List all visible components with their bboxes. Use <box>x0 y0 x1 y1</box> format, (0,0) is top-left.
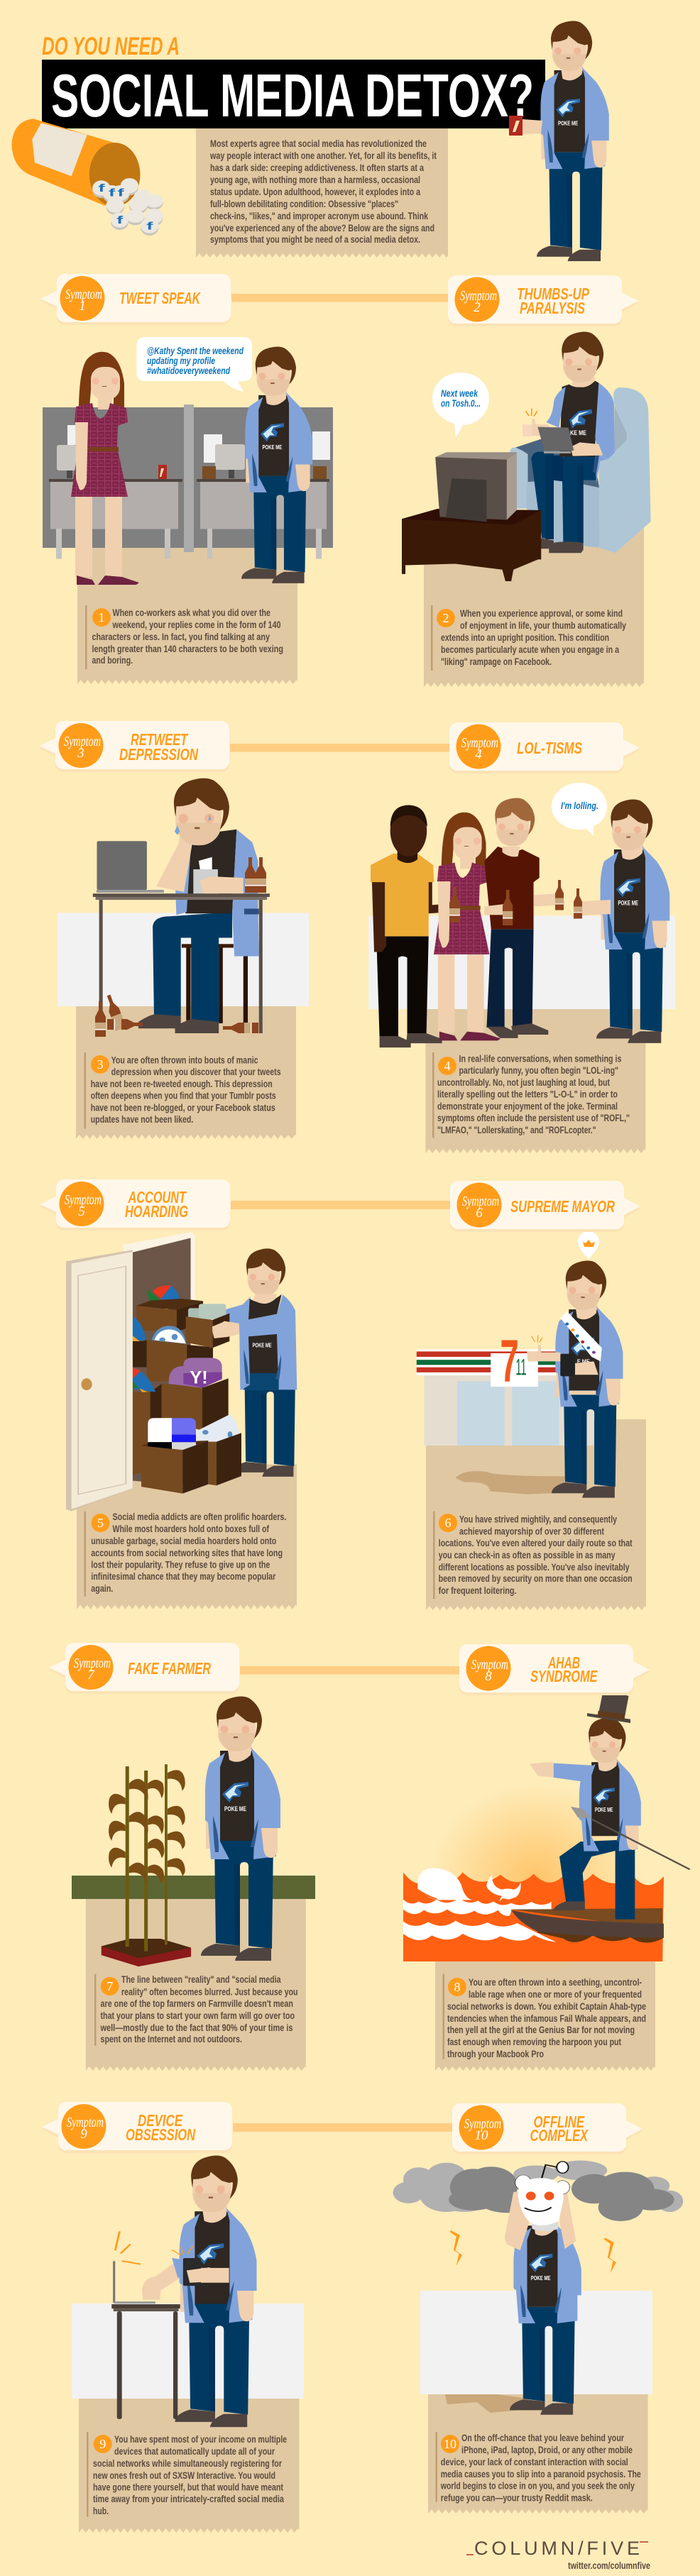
scene: sea, whale and boat <box>403 1868 664 1961</box>
header: symptom 8: Symptom <box>471 1657 508 1673</box>
character head: red shirt friend <box>495 798 535 846</box>
text: symptom 10: iPhone, iPad, laptop, Droid, or any other mobile <box>461 2444 633 2455</box>
speech bubble: tweet <box>136 337 252 392</box>
header: symptom 2: THUMBS-UP <box>517 285 589 303</box>
character: mayor with sash <box>552 1260 623 1498</box>
text: symptom 3: often deepens when you find that your Tumblr posts <box>91 1090 276 1101</box>
character: man lolling: POKE ME <box>618 899 638 906</box>
wall: symptom 10 <box>420 2291 652 2394</box>
text: symptom 4: demonstrate your enjoyment of the joke. Terminal <box>437 1100 618 1111</box>
header: symptom 8 <box>459 1644 650 1695</box>
panel: symptom 4 <box>425 1009 645 1153</box>
text: symptom 3: depression when you discover that your tweets <box>111 1066 281 1077</box>
text block: intro: full-blown debilitating condition: Obsessive "places" <box>210 198 398 209</box>
panel: symptom 3 <box>76 1006 296 1139</box>
header: symptom 8: AHAB <box>547 1653 580 1672</box>
wall: symptom 3 <box>58 913 309 1006</box>
character: hero man with mug: POKE ME <box>558 119 578 126</box>
text: symptom 4: uncontrollably. No, not just laughing at loud, but <box>437 1077 610 1088</box>
header: symptom 7: Symptom <box>74 1656 111 1671</box>
text: symptom 7: well—mostly due to the fact that 90% of your time is <box>100 2022 293 2033</box>
header: symptom 10: COMPLEX <box>530 2126 589 2145</box>
header: symptom 2: 2 <box>474 300 481 315</box>
text: symptom 3: 3 <box>97 1057 104 1072</box>
character: ahab <box>530 1692 690 1920</box>
text: symptom 6: different locations as possible. You've also inevitably <box>439 1561 630 1573</box>
header: symptom 2: PARALYSIS <box>520 299 585 317</box>
header: symptom 9: 9 <box>80 2127 87 2142</box>
text: symptom 1: characters or less. In fact, you find talking at any <box>92 631 270 642</box>
text: symptom 2 <box>431 605 626 671</box>
text: symptom 10: world begins to close in on you, and you seek the only <box>440 2479 635 2491</box>
header: symptom 1: TWEET SPEAK <box>119 289 201 307</box>
scene: office <box>43 404 333 559</box>
panel: symptom 6 <box>426 1419 646 1610</box>
header: symptom 1: 1 <box>79 299 86 314</box>
text: symptom 10: device, your lack of constant interaction with social <box>441 2456 628 2467</box>
hand on box <box>212 1321 239 1338</box>
header: symptom 3 <box>39 721 229 772</box>
header: symptom 6: SUPREME MAYOR <box>510 1197 615 1216</box>
connector band row 4 <box>222 1666 459 1675</box>
text: symptom 7 <box>94 1974 298 2046</box>
text: symptom 4: literally spelling out the letters "L-O-L" in order to <box>437 1089 618 1100</box>
stacked boxes and social icons: Y! <box>190 1367 208 1387</box>
panel: symptom 7 <box>86 1899 306 2071</box>
character head: crying man <box>174 778 229 845</box>
text: symptom 9: devices that automatically update all of your <box>114 2445 275 2457</box>
icon: lightning bolts <box>450 2219 616 2273</box>
speech bubble: tweet: #whatidoeveryweekend <box>147 365 230 376</box>
text: symptom 9 <box>87 2432 287 2517</box>
text: symptom 5: unusable garbage, social media hoarders hold onto <box>91 1535 276 1546</box>
text: symptom 7: spent on the Internet and not outdoors. <box>101 2033 242 2044</box>
header: symptom 3: 3 <box>77 746 84 761</box>
footer: twitter handle: twitter.com/columnfive <box>568 2560 650 2571</box>
text: symptom 7: The line between "reality" and "social media <box>121 1974 281 1985</box>
icon: mayor crown pin <box>578 1231 599 1259</box>
character: woman <box>71 352 139 585</box>
text: symptom 7: 7 <box>106 1979 113 1993</box>
text: symptom 2: extends into an upright position. This condition <box>441 632 609 643</box>
character: woman friend <box>434 813 501 1040</box>
text block: intro: status update. Upon adulthood, however, it explodes into a <box>210 186 420 197</box>
wall: symptom 9 <box>72 2303 304 2399</box>
reddit mask and raised arms <box>505 2162 576 2250</box>
character: man in reddit mask <box>510 2221 581 2415</box>
sash, phone and thumb <box>527 1311 602 1394</box>
speech bubble: tweet: updating my profile <box>147 355 215 366</box>
header: symptom 3: DEPRESSION <box>119 745 198 764</box>
panel: intro <box>196 128 448 258</box>
icon: pill bottle: f <box>116 214 124 226</box>
text block: intro: way people interact with one another. Yet, for all its benefits, it <box>209 150 437 161</box>
header: symptom 9: DEVICE <box>138 2111 182 2130</box>
text: symptom 8: through your Macbook Pro <box>447 2048 544 2059</box>
header: symptom 10: 10 <box>474 2128 488 2143</box>
text: symptom 7: reality" often becomes blurred. Just because you <box>121 1986 298 1997</box>
text: symptom 1: 1 <box>98 610 105 624</box>
character: man on couch head <box>562 331 603 382</box>
text: symptom 8 <box>443 1974 646 2059</box>
text: symptom 5 <box>84 1511 287 1597</box>
header: symptom 3: RETWEET <box>131 730 188 749</box>
header: symptom 5: ACCOUNT <box>128 1188 187 1206</box>
text: symptom 5: 5 <box>97 1516 104 1530</box>
scene: laptop on desk <box>111 2231 182 2419</box>
text: symptom 1: and boring. <box>92 654 133 666</box>
band: field green <box>72 1876 315 1899</box>
text: symptom 3: updates have not been liked. <box>91 1113 193 1125</box>
text: symptom 6: 6 <box>444 1516 452 1530</box>
text: symptom 10 <box>436 2432 641 2503</box>
character: man lolling <box>596 799 669 1043</box>
text: symptom 5: accounts from social networking sites that have long <box>91 1547 283 1558</box>
header: symptom 2: Symptom <box>460 288 497 304</box>
header: symptom 6 <box>450 1181 640 1232</box>
panel: symptom 9 <box>79 2399 299 2533</box>
header: symptom 9: Symptom <box>67 2115 104 2130</box>
scene: tv and table <box>402 452 541 581</box>
scene: man crying at laptop <box>93 827 270 1033</box>
text: symptom 8: then yell at the girl at the Genius Bar for not moving <box>447 2024 635 2035</box>
stacked boxes and social icons <box>132 1285 241 1494</box>
character: mayor with sash: E ME <box>577 1358 590 1365</box>
text: symptom 1: length greater than 140 characters to be both vexing <box>92 643 283 654</box>
text: symptom 10: On the off-chance that you leave behind your <box>461 2432 624 2443</box>
text: symptom 6 <box>433 1512 633 1599</box>
header: symptom 7 <box>49 1643 239 1694</box>
text: symptom 4: particularly funny, you often begin "LOL-ing" <box>459 1064 618 1076</box>
text: symptom 2: becomes particularly acute when you engage in a <box>441 644 619 655</box>
text: symptom 9: time away from your intricately-crafted social media <box>93 2493 284 2504</box>
header: symptom 5: Symptom <box>65 1192 102 1208</box>
text: symptom 2: When you experience approval, or some kind <box>460 607 623 619</box>
scene: 7-eleven store: 11 <box>515 1353 526 1380</box>
icon: pill bottle: f <box>117 187 124 199</box>
text: symptom 6: locations. You've even altered your daily route so that <box>439 1537 633 1548</box>
text: symptom 6: you can check-in as often as possible in as many <box>439 1549 616 1561</box>
text: symptom 9: new ones fresh out of SXSW Interactive. You would <box>93 2470 275 2481</box>
character: man with phone <box>175 2156 257 2427</box>
text: symptom 5: While most hoarders hold onto boxes full of <box>112 1523 269 1534</box>
header: symptom 4 <box>449 722 640 774</box>
text: symptom 6: been removed by security on more than one occasion <box>439 1573 633 1584</box>
text: symptom 9: hub. <box>93 2505 109 2516</box>
character: farmer man <box>201 1696 280 1961</box>
character: man in reddit mask: POKE ME <box>531 2274 551 2281</box>
bottles: friends <box>449 880 582 925</box>
connector band row 2 <box>212 744 449 752</box>
character: man in office <box>241 346 312 583</box>
text: symptom 5: infinitesimal chance that they may become popular <box>91 1570 276 1582</box>
character: man holding box: POKE ME <box>253 1342 272 1348</box>
text block: intro: Most experts agree that social media has revolutionized the <box>210 138 427 149</box>
text: symptom 2: "liking" rampage on Facebook. <box>441 656 552 667</box>
icon: pill bottle <box>11 119 163 236</box>
text: symptom 4: 4 <box>444 1059 450 1073</box>
header: symptom 1: Symptom <box>65 287 102 302</box>
text: symptom 9: 9 <box>99 2437 106 2451</box>
text: symptom 6: achieved mayorship of over 30 different <box>459 1525 604 1536</box>
character: man holding box <box>224 1248 297 1477</box>
character: man in office: POKE ME <box>263 444 283 451</box>
scene: 7-eleven store <box>417 1327 594 1495</box>
character: ahab: POKE ME <box>595 1807 613 1813</box>
character: hero man with mug <box>509 21 609 261</box>
text: symptom 4 <box>432 1052 630 1138</box>
text block: intro: check-ins, "likes," and improper acronym use abound. Think <box>210 210 428 221</box>
header: symptom 5: 5 <box>78 1204 85 1219</box>
header: symptom 5 <box>40 1179 230 1231</box>
text: symptom 7: that your plans to start your own farm will go over too <box>101 2010 295 2021</box>
text: symptom 3: have not been re-tweeted enough. This depression <box>91 1078 273 1089</box>
speech bubble: i'm lolling <box>552 783 607 836</box>
text: symptom 1 <box>85 605 283 669</box>
speech bubble: tweet: @Kathy Spent the weekend <box>147 345 244 356</box>
panel: symptom 8 <box>435 1961 655 2071</box>
speech bubble: next week <box>432 373 489 438</box>
panel: symptom 1 <box>77 548 297 684</box>
panel: symptom 5 <box>77 1465 297 1609</box>
character: red shirt friend <box>484 847 565 1038</box>
scene: corn stalks in planter <box>102 1764 191 1966</box>
door <box>66 1250 133 1512</box>
text: symptom 1: weekend, your replies come in the form of 140 <box>112 619 281 630</box>
text block: intro: has a dark side: creeping addictiveness. It often starts at a <box>210 162 424 173</box>
connector band row 5 <box>215 2123 452 2132</box>
icon: pill bottle: f <box>98 182 105 194</box>
text: symptom 5: lost their popularity. They refuse to give up on the <box>91 1558 270 1570</box>
bottles: table and floor <box>95 857 266 1037</box>
text: symptom 10: refuge you can—your trusty Reddit mask. <box>441 2492 593 2503</box>
connector band row 3 <box>212 1201 450 1209</box>
scene: 7-eleven store: 7 <box>500 1327 519 1394</box>
speech bubble: next week: Next week <box>441 387 478 399</box>
text: symptom 10: 10 <box>444 2437 456 2451</box>
text block: intro <box>209 138 437 245</box>
puddle <box>445 2394 529 2413</box>
header: symptom 6: Symptom <box>462 1194 499 1209</box>
text: symptom 5: Social media addicts are often prolific hoarders. <box>112 1511 287 1522</box>
storm clouds <box>393 2161 683 2221</box>
text: symptom 5: again. <box>91 1583 113 1594</box>
text: symptom 9: You have spent most of your income on multiple <box>114 2433 287 2445</box>
header: symptom 1 <box>40 274 231 325</box>
text: symptom 2: 2 <box>443 611 449 625</box>
text: symptom 1: When co-workers ask what you did over the <box>112 607 270 618</box>
arm holding bottle <box>582 900 611 915</box>
header: symptom 4: 4 <box>475 747 482 762</box>
text: symptom 9: social networks while simultaneously registering for <box>93 2457 282 2469</box>
header: symptom 2 <box>448 275 638 326</box>
text: symptom 3: You are often thrown into bouts of manic <box>111 1054 258 1065</box>
text block: intro: symptoms that you might be need of a social media detox. <box>210 233 420 245</box>
header: symptom 10: OFFLINE <box>534 2113 584 2131</box>
header: symptom 8: SYNDROME <box>530 1667 598 1685</box>
text: symptom 8: lable rage when one or more of your frequented <box>469 1988 642 2000</box>
speech bubble: next week: on Tosh.0... <box>441 397 481 409</box>
text: symptom 9: have gone there yourself, but that would have meant <box>93 2482 283 2493</box>
text: symptom 6: for frequent loitering. <box>439 1585 517 1596</box>
header: symptom 6: 6 <box>476 1206 483 1221</box>
text: symptom 6: You have strived mightily, and consequently <box>459 1513 617 1524</box>
text block: intro: young age, with nothing more than a harmless, occasional <box>210 174 420 185</box>
text: symptom 3 <box>84 1052 281 1128</box>
header: symptom 3: Symptom <box>64 734 101 749</box>
header: symptom 7: 7 <box>87 1668 95 1683</box>
text: symptom 8: 8 <box>454 1980 460 1994</box>
character: farmer man: POKE ME <box>224 1805 246 1813</box>
header: symptom 7: FAKE FARMER <box>128 1659 211 1678</box>
poke me label on couch man: KE ME <box>570 429 586 437</box>
icon: pill bottle: f <box>109 187 116 199</box>
header: symptom 5: HOARDING <box>125 1202 188 1221</box>
header: symptom 8: 8 <box>485 1669 492 1684</box>
icon: pill bottle: f <box>146 220 153 232</box>
text: symptom 3: have not been re-blogged, or your Facebook status <box>91 1101 275 1113</box>
closet interior <box>123 1232 195 1485</box>
header: symptom 9 <box>42 2102 232 2153</box>
footer: column five logo: COLUMN/FIVE <box>474 2538 640 2559</box>
text: symptom 4: symptoms often include the persistent use of "ROFL," <box>437 1112 630 1123</box>
text: symptom 8: You are often thrown into a seething, uncontrol- <box>469 1976 642 1988</box>
connector band row 1 <box>221 294 448 302</box>
sun glow <box>430 1783 642 1975</box>
scene: armchair and seated man <box>510 378 651 553</box>
wall: symptom 4 <box>368 915 675 1009</box>
text: symptom 4: In real-life conversations, when something is <box>459 1052 622 1064</box>
text: symptom 10: media causes you to slip into a paranoid psychosis. The <box>441 2468 641 2479</box>
text: symptom 8: fast enough when removing the harpoon you put <box>447 2036 621 2047</box>
text: symptom 7: are one of the top farmers on Farmville doesn't mean <box>101 1998 293 2009</box>
scene: friends with beers <box>371 805 451 1047</box>
panel: symptom 2 <box>424 523 644 687</box>
text block: intro: you've experienced any of the above? Below are the signs and <box>210 222 434 233</box>
header: symptom 4: LOL-TISMS <box>517 739 582 757</box>
speech bubble: i'm lolling: I'm lolling. <box>561 800 598 811</box>
panel: symptom 10 <box>428 2394 648 2514</box>
text: symptom 4: "LMFAO," "Lollerskating," and "ROFLcopter." <box>437 1124 596 1135</box>
header: symptom 10: Symptom <box>464 2116 501 2132</box>
arm, phone and shirt lift <box>142 2246 229 2300</box>
header: symptom 9: OBSESSION <box>126 2125 195 2144</box>
title: do you need a: DO YOU NEED A <box>42 33 180 60</box>
text: symptom 2: of enjoyment in life, your thumb automatically <box>460 620 626 631</box>
header: symptom 4: Symptom <box>461 735 498 751</box>
header: symptom 10 <box>452 2103 642 2154</box>
